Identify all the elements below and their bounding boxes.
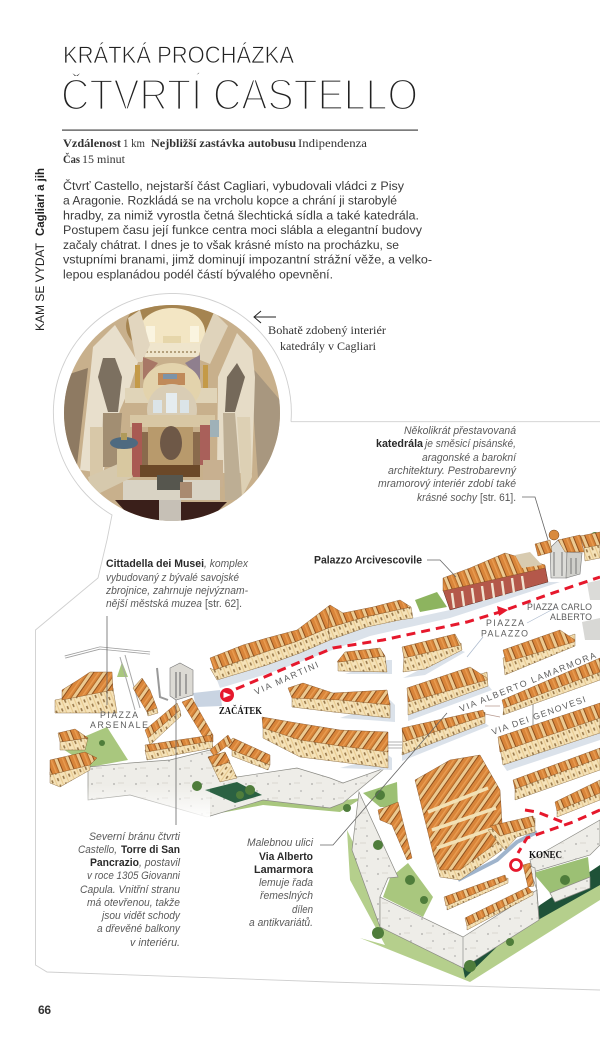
central house blocks bbox=[262, 630, 600, 817]
photo: cathedral interior bbox=[60, 296, 285, 525]
callout: cathedral: krásné sochy bbox=[417, 492, 478, 504]
callout: Via Alberto Lamarmora: Via Alberto bbox=[259, 851, 313, 863]
leader lines bbox=[107, 497, 548, 845]
trees bbox=[99, 532, 600, 972]
street and square labels bbox=[90, 602, 597, 737]
walk facts: Vzdálenost bbox=[63, 138, 121, 150]
intro text: začaly chátrat. I dnes je to však krásné místo na procházku, se bbox=[63, 238, 399, 252]
section label: KAM SE VYDAT bbox=[35, 243, 47, 331]
callout: Via Alberto Lamarmora bbox=[247, 837, 314, 929]
end label: KONEC bbox=[529, 850, 562, 861]
photo caption bbox=[268, 325, 386, 353]
callout: Torre di San Pancrazio: Capula. Vnitřní stranu bbox=[80, 884, 180, 896]
arrow to photo bbox=[254, 311, 276, 323]
start marker bbox=[220, 688, 234, 702]
callout: Via Alberto Lamarmora: a antikvariátů. bbox=[249, 917, 313, 929]
callout: Torre di San Pancrazio: Castello, bbox=[78, 844, 117, 856]
street connectors bbox=[388, 607, 557, 748]
callout: Torre di San Pancrazio: jsou vidět schody bbox=[100, 910, 181, 922]
street and square labels: VIA DEI GENOVESI bbox=[490, 694, 587, 737]
callout: Torre di San Pancrazio: , postavil bbox=[139, 857, 181, 869]
intro text: Čtvrť Castello, nejstarší část Cagliari, vybudovali vládci z Pisy bbox=[63, 178, 405, 193]
callout: Cittadella dei Musei: nější městská muzea bbox=[106, 598, 202, 610]
callout: cathedral: je směsicí pisánské, bbox=[423, 438, 516, 450]
cathedral bbox=[535, 530, 600, 640]
end marker bbox=[510, 860, 522, 870]
callout: Cittadella dei Musei: zbrojnice, zahrnuje nejvýznam- bbox=[105, 585, 248, 597]
title: ČTVRTÍ CASTELLO bbox=[61, 70, 418, 120]
callout: Palazzo Arcivescovile: Palazzo Arcivescovile bbox=[314, 554, 422, 566]
street and square labels: PIAZZA bbox=[100, 710, 138, 720]
callout: Torre di San Pancrazio: má otevřenou, takže bbox=[87, 897, 180, 909]
title: KRÁTKÁ PROCHÁZKA bbox=[63, 42, 294, 69]
street and square labels: PIAZZA CARLO bbox=[527, 602, 592, 612]
callout: cathedral: aragonské a barokní bbox=[422, 452, 517, 464]
callout: Via Alberto Lamarmora: Lamarmora bbox=[254, 864, 314, 876]
outer greens bbox=[60, 592, 600, 982]
route arrowhead bbox=[497, 606, 508, 616]
callout: Via Alberto Lamarmora: Malebnou ulici bbox=[247, 837, 314, 849]
callout: cathedral bbox=[376, 425, 517, 504]
callout: Torre di San Pancrazio: v roce 1305 Giovanni bbox=[87, 870, 181, 882]
walk facts: Nejbližší zastávka autobusu bbox=[151, 138, 297, 150]
callout: Cittadella dei Musei: [str. 62]. bbox=[205, 598, 242, 610]
west buildings and Torre di San Pancrazio bbox=[50, 663, 270, 787]
intro text: Postupem času její funkce centra moci slábla a elegantní budovy bbox=[63, 223, 423, 237]
callout: cathedral: architektury. Pestrobarevný bbox=[388, 465, 517, 477]
street and square labels: VIA MARTINI bbox=[253, 660, 320, 697]
callout: Torre di San Pancrazio: Torre di San bbox=[121, 844, 180, 856]
start label: ZAČÁTEK bbox=[219, 704, 262, 717]
intro text: hradby, za nimiž vyrostla četná šlechtická sídla a také katedrála. bbox=[63, 208, 419, 222]
southern large block bbox=[378, 755, 535, 930]
walk facts bbox=[63, 138, 367, 166]
walking route bbox=[236, 577, 600, 853]
intro text: a Aragonie. Rozkládá se na vrcholu kopce a chrání ji starobylé bbox=[63, 194, 397, 208]
illustrated map of Castello bbox=[50, 530, 600, 982]
callout: Via Alberto Lamarmora: dílen bbox=[292, 904, 313, 916]
Palazzo Arcivescovile building bbox=[443, 552, 548, 610]
callout: cathedral: [str. 61]. bbox=[480, 492, 516, 504]
north row of houses bbox=[210, 600, 413, 680]
shadows bbox=[193, 582, 600, 880]
intro text bbox=[63, 178, 432, 281]
callout: Cittadella dei Musei: vybudovaný z bývalé savojské bbox=[106, 572, 239, 584]
callout: cathedral: Několikrát přestavovaná bbox=[404, 425, 516, 437]
arsenal paths bbox=[65, 648, 168, 710]
callout: Via Alberto Lamarmora: řemeslných bbox=[260, 890, 313, 902]
callout: Via Alberto Lamarmora: lemuje řada bbox=[259, 877, 313, 889]
callout: Cittadella dei Musei: , komplex bbox=[204, 558, 249, 570]
callout: Torre di San Pancrazio: a dřevěné balkony bbox=[97, 923, 181, 935]
callout: cathedral: katedrála bbox=[376, 438, 424, 450]
walk facts: 1 km bbox=[123, 138, 145, 150]
callout: Torre di San Pancrazio bbox=[78, 831, 181, 949]
walk facts: Indipendenza bbox=[298, 138, 367, 150]
section label bbox=[35, 168, 47, 331]
callout: Torre di San Pancrazio: v interiéru. bbox=[130, 937, 180, 949]
icon: Torre di San Pancrazio bbox=[170, 663, 193, 700]
callout: Torre di San Pancrazio: Pancrazio bbox=[90, 857, 139, 869]
map frame outline bbox=[36, 293, 600, 990]
callout: Torre di San Pancrazio: Severní bránu čtvrti bbox=[89, 831, 181, 843]
callout: cathedral: mramorový interiér zdobí také bbox=[378, 478, 516, 490]
intro text: vstupními branami, jimž dominují impozantní strážní věže, a velko- bbox=[63, 253, 432, 267]
photo caption: katedrály v Cagliari bbox=[280, 341, 376, 353]
title bbox=[61, 42, 418, 120]
section label: Cagliari a jih bbox=[35, 168, 47, 236]
intro text: lepou esplanádou podél částí bývalého opevnění. bbox=[63, 267, 333, 281]
page number: 66 bbox=[38, 1003, 51, 1017]
photo caption: Bohatě zdobený interiér bbox=[268, 325, 386, 337]
street and square labels: PIAZZA bbox=[486, 618, 524, 628]
walk facts: 15 minut bbox=[82, 154, 126, 166]
walk facts: Čas bbox=[63, 152, 80, 166]
fortification walls bbox=[60, 750, 600, 968]
street and square labels: ALBERTO bbox=[550, 612, 592, 622]
callout: Cittadella dei Musei: Cittadella dei Musei bbox=[106, 558, 204, 570]
street and square labels: VIA ALBERTO LAMARMORA bbox=[458, 650, 597, 714]
street and square labels: PALAZZO bbox=[481, 628, 528, 638]
callout: Cittadella dei Musei bbox=[105, 558, 249, 610]
street and square labels: ARSENALE bbox=[90, 720, 148, 730]
